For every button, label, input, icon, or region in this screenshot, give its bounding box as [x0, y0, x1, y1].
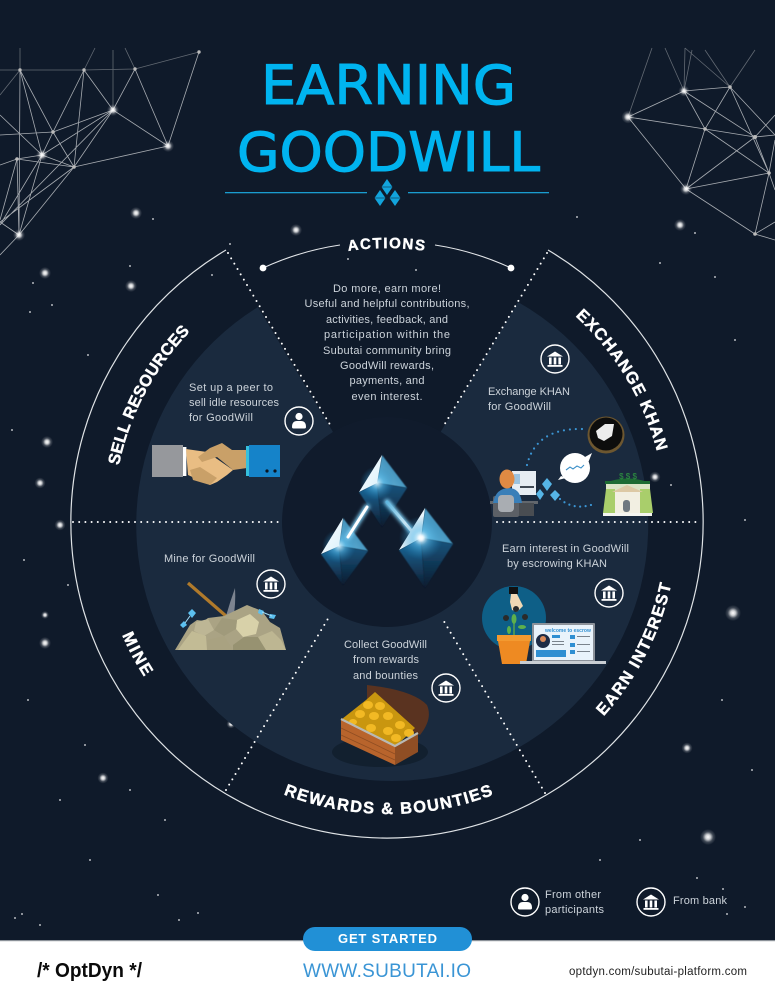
- text: sell resources: Set up a peer to: [189, 382, 273, 394]
- network constellation left: [0, 48, 201, 255]
- icon: handshake: [152, 443, 280, 485]
- button: get started: [303, 927, 472, 951]
- text: mine: Mine for GoodWill: [164, 553, 255, 565]
- heading: exchange khan: EXCHANGE KHAN: [576, 308, 668, 450]
- illustration: escrow scene: [482, 586, 606, 664]
- person: [493, 470, 522, 517]
- bank building: [603, 472, 653, 516]
- text: earn interest: by escrowing KHAN: [507, 558, 607, 570]
- outer ring: [71, 250, 703, 838]
- illustration: treasure chest: [332, 685, 429, 767]
- coin: [588, 416, 624, 454]
- text: sell resources: for GoodWill: [189, 412, 253, 424]
- gem: left: [321, 518, 368, 585]
- text: earn interest: Earn interest in GoodWill: [502, 543, 629, 555]
- heading: earn interest: EARN INTEREST: [596, 582, 670, 716]
- legend: from other participants: participants: [545, 904, 604, 916]
- legend: from bank: From bank: [673, 895, 728, 907]
- panel: lighter wedge disc: [136, 302, 648, 781]
- title: EARNING: [261, 54, 516, 117]
- title: [237, 54, 540, 184]
- gem: top: [359, 455, 407, 527]
- text: actions description: Subutai community bring: [323, 345, 451, 357]
- text: actions description: Do more, earn more!: [333, 283, 441, 295]
- text: sell resources: sell idle resources: [189, 397, 280, 409]
- text: actions description: [304, 283, 470, 403]
- text: exchange khan: for GoodWill: [488, 401, 551, 413]
- title divider with gem logo: [225, 179, 549, 206]
- icon: from bank (mine): [257, 570, 285, 598]
- icon: from participants (sell): [285, 407, 313, 435]
- network constellation right: [622, 48, 775, 240]
- heading: mine: MINE: [122, 631, 154, 676]
- text: rewards and bounties: from rewards: [353, 654, 420, 666]
- illustration: escrow scene: welcome to escrow: [544, 628, 591, 634]
- dotted route: [527, 429, 582, 465]
- actions arc with end dots: [260, 245, 514, 271]
- text: rewards and bounties: [344, 639, 427, 682]
- icon: from bank (rewards): [432, 674, 460, 702]
- heading: sell resources: SELL RESOURCES: [108, 326, 188, 465]
- text: actions description: even interest.: [352, 391, 422, 403]
- text: actions description: GoodWill rewards,: [340, 360, 434, 372]
- text: actions description: payments, and: [350, 375, 424, 387]
- illustration: rock pile and pick: [175, 583, 286, 650]
- gem: right: [399, 508, 453, 588]
- text: exchange khan: Exchange KHAN: [488, 386, 570, 398]
- link: optdyn platform: optdyn.com/subutai-platform.com: [569, 966, 747, 978]
- monitor: [512, 471, 536, 495]
- text: exchange khan: [488, 386, 570, 413]
- link: subutai website: WWW.SUBUTAI.IO: [303, 961, 471, 982]
- text: earn interest: [502, 543, 629, 570]
- bank building: $ $ $: [619, 472, 637, 481]
- legend: from other participants: [511, 888, 604, 916]
- text: rewards and bounties: and bounties: [353, 670, 418, 682]
- text: actions description: activities, feedback, and: [326, 314, 448, 326]
- button: get started: GET STARTED: [338, 931, 437, 946]
- dotted sector dividers: [73, 253, 701, 793]
- centre disc: [282, 417, 492, 627]
- heading: actions: ACTIONS: [348, 238, 425, 252]
- logo: OptDyn: /* OptDyn */: [37, 960, 142, 982]
- connector bars: [348, 502, 415, 537]
- legend: from bank: [637, 888, 728, 916]
- starfield: [11, 207, 753, 926]
- icon: from bank (exchange): [541, 345, 569, 373]
- footer band: [0, 940, 775, 1003]
- legend: from other participants: From other: [545, 889, 601, 901]
- text: actions description: participation within the: [324, 329, 450, 341]
- illustration: central gems: [321, 455, 453, 588]
- speech bubble: [558, 453, 592, 483]
- text: actions description: Useful and helpful contributions,: [304, 298, 470, 310]
- text: sell resources: [189, 382, 280, 424]
- icon: from bank (earn): [595, 579, 623, 607]
- desk: [490, 501, 538, 504]
- small gems: [536, 478, 560, 501]
- title: GOODWILL: [237, 121, 540, 184]
- illustration: exchange scene: [490, 416, 653, 517]
- text: rewards and bounties: Collect GoodWill: [344, 639, 427, 651]
- heading: rewards and bounties: REWARDS & BOUNTIES: [284, 784, 492, 814]
